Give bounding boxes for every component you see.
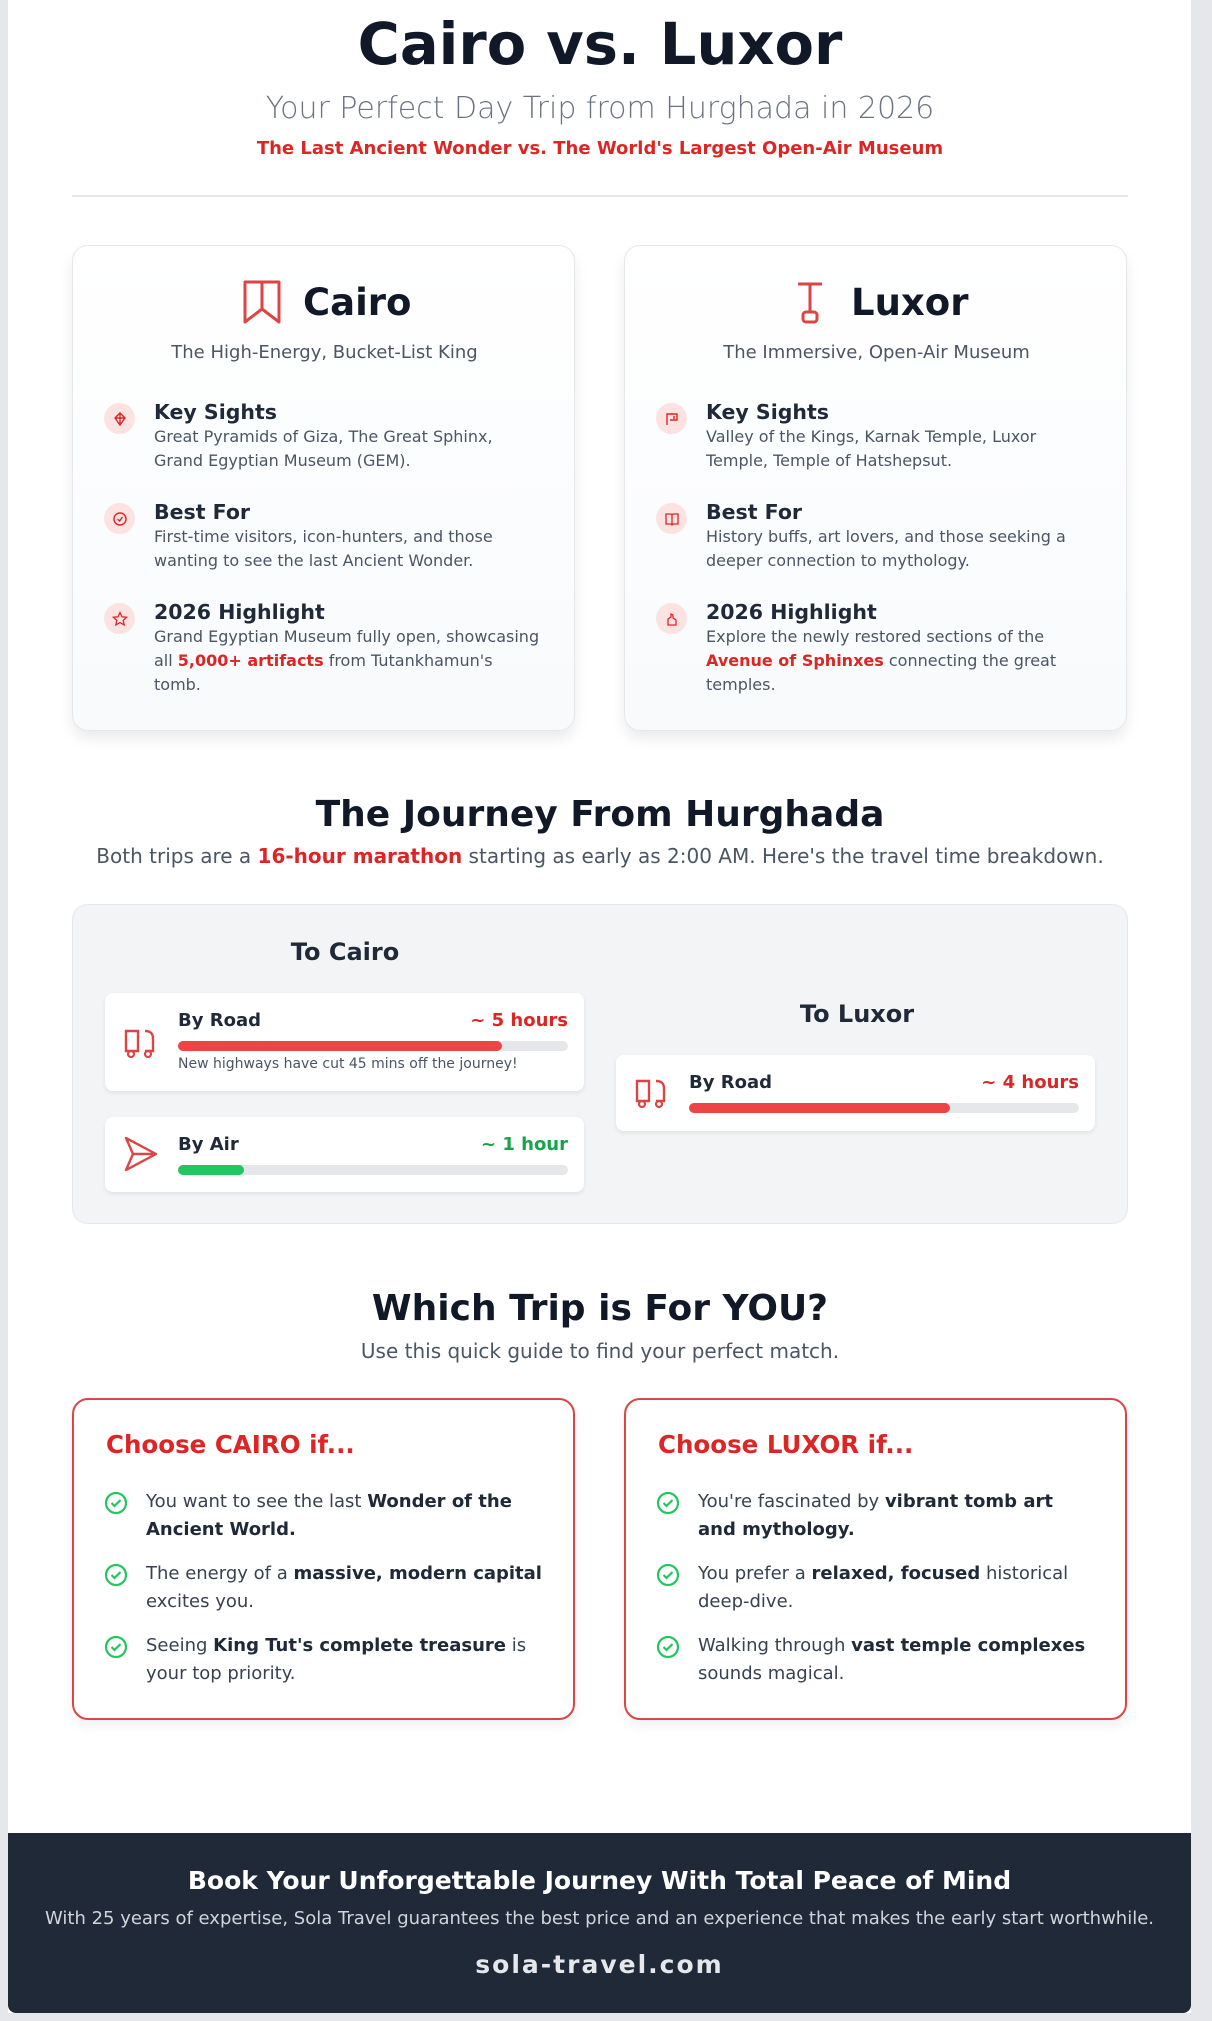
heading: which trip: Which Trip is For YOU? (372, 1288, 828, 1329)
card: cairo air (105, 1117, 584, 1192)
card: cairo road: By Road (178, 1010, 261, 1031)
heading: journey: The Journey From Hurghada (316, 794, 884, 835)
panel: luxor: Valley of the Kings, Karnak Temple, Luxor Temple, Temple of Hatshepsut. (706, 427, 1036, 470)
panel: cairo: First-time visitors, icon-hunters, and those wanting to see the last Ancient Wonder. (154, 527, 493, 570)
item 1: You're fascinated by vibrant tomb art (698, 1491, 1053, 1512)
item: best for (656, 500, 1066, 570)
card: luxor road: ~ 4 hours (981, 1072, 1079, 1093)
journey subtitle: Both trips are a 16-hour marathon starting as early as 2:00 AM. Here's the travel time breakdown. (96, 844, 1104, 868)
card: luxor road: By Road (689, 1072, 772, 1093)
item: key sights (104, 400, 493, 470)
item 3: Seeing King Tut's complete treasure is your top priority. (146, 1635, 526, 1684)
card: cairo road: New highways have cut 45 mins off the journey! (178, 1056, 518, 1072)
icon: bus (124, 1030, 154, 1058)
card: cairo road: ~ 5 hours (470, 1010, 568, 1031)
card: cairo road (105, 993, 584, 1091)
panel: luxor: 2026 Highlight (706, 600, 877, 624)
title: Cairo vs. Luxor (358, 11, 842, 78)
panel: luxor: Explore the newly restored sections of the Avenue of Sphinxes connecting the great temples. (706, 627, 1056, 694)
panel: luxor: History buffs, art lovers, and those seeking a deeper connection to mythology. (706, 527, 1066, 570)
heading: to luxor: To Luxor (800, 1000, 914, 1028)
panel: cairo: Great Pyramids of Giza, The Great Sphinx, Grand Egyptian Museum (GEM). (154, 427, 493, 470)
footer text: With 25 years of expertise, Sola Travel guarantees the best price and an experience that makes the early start worthwhile. (45, 1908, 1154, 1929)
heading: Cairo (303, 281, 411, 324)
tagline: The High-Energy, Bucket-List King (171, 342, 478, 363)
icon: bus (636, 1080, 666, 1108)
item: highlight (104, 600, 539, 694)
icon: ankh-like (798, 282, 822, 324)
card: luxor road (616, 1055, 1095, 1131)
card: cairo air: ~ 1 hour (481, 1134, 568, 1155)
item: best for (104, 500, 493, 570)
item 2: You prefer a relaxed, focused historical deep-dive. (698, 1563, 1068, 1612)
panel: cairo: Best For (154, 500, 250, 524)
icon: plane (124, 1136, 158, 1172)
panel: cairo (72, 245, 575, 731)
item 1 (656, 1491, 1053, 1540)
heading: Luxor (851, 281, 968, 324)
item 2: The energy of a massive, modern capital excites you. (146, 1563, 542, 1612)
panel: journey (72, 904, 1128, 1224)
panel: choose cairo (72, 1398, 575, 1720)
footer (8, 1833, 1191, 2013)
item 1: You want to see the last Wonder of the Ancient World. (146, 1491, 512, 1540)
panel: choose luxor (624, 1398, 1127, 1720)
panel: luxor (624, 245, 1127, 731)
bar: 5 hours (178, 1041, 568, 1051)
panel: luxor: Best For (706, 500, 802, 524)
footer heading: Book Your Unforgettable Journey With Total Peace of Mind (188, 1866, 1011, 1895)
footer url: sola-travel.com (475, 1950, 724, 1979)
subtitle: Your Perfect Day Trip from Hurghada in 2026 (266, 91, 934, 126)
panel: cairo: Grand Egyptian Museum fully open, showcasing all 5,000+ artifacts from Tutankhamun's tomb. (154, 627, 539, 694)
item 1: and mythology. (698, 1519, 855, 1540)
item: highlight (656, 600, 1056, 694)
panel: choose luxor: Choose LUXOR if... (658, 1430, 913, 1459)
item 3: Walking through vast temple complexes sounds magical. (698, 1635, 1085, 1684)
tagline: The Immersive, Open-Air Museum (723, 342, 1030, 363)
icon: bookmark (244, 280, 280, 324)
item: key sights (656, 400, 1036, 470)
panel: luxor: Key Sights (706, 400, 829, 424)
panel: choose cairo: Choose CAIRO if... (106, 1430, 355, 1459)
panel: cairo: 2026 Highlight (154, 600, 325, 624)
heading: to cairo: To Cairo (291, 938, 399, 966)
bar: 4 hours (689, 1103, 1079, 1113)
bar: 1 hour (178, 1165, 568, 1175)
which subtitle: Use this quick guide to find your perfect match. (361, 1339, 839, 1363)
card: cairo air: By Air (178, 1134, 239, 1155)
tagline: The Last Ancient Wonder vs. The World's Largest Open-Air Museum (257, 138, 943, 159)
panel: cairo: Key Sights (154, 400, 277, 424)
